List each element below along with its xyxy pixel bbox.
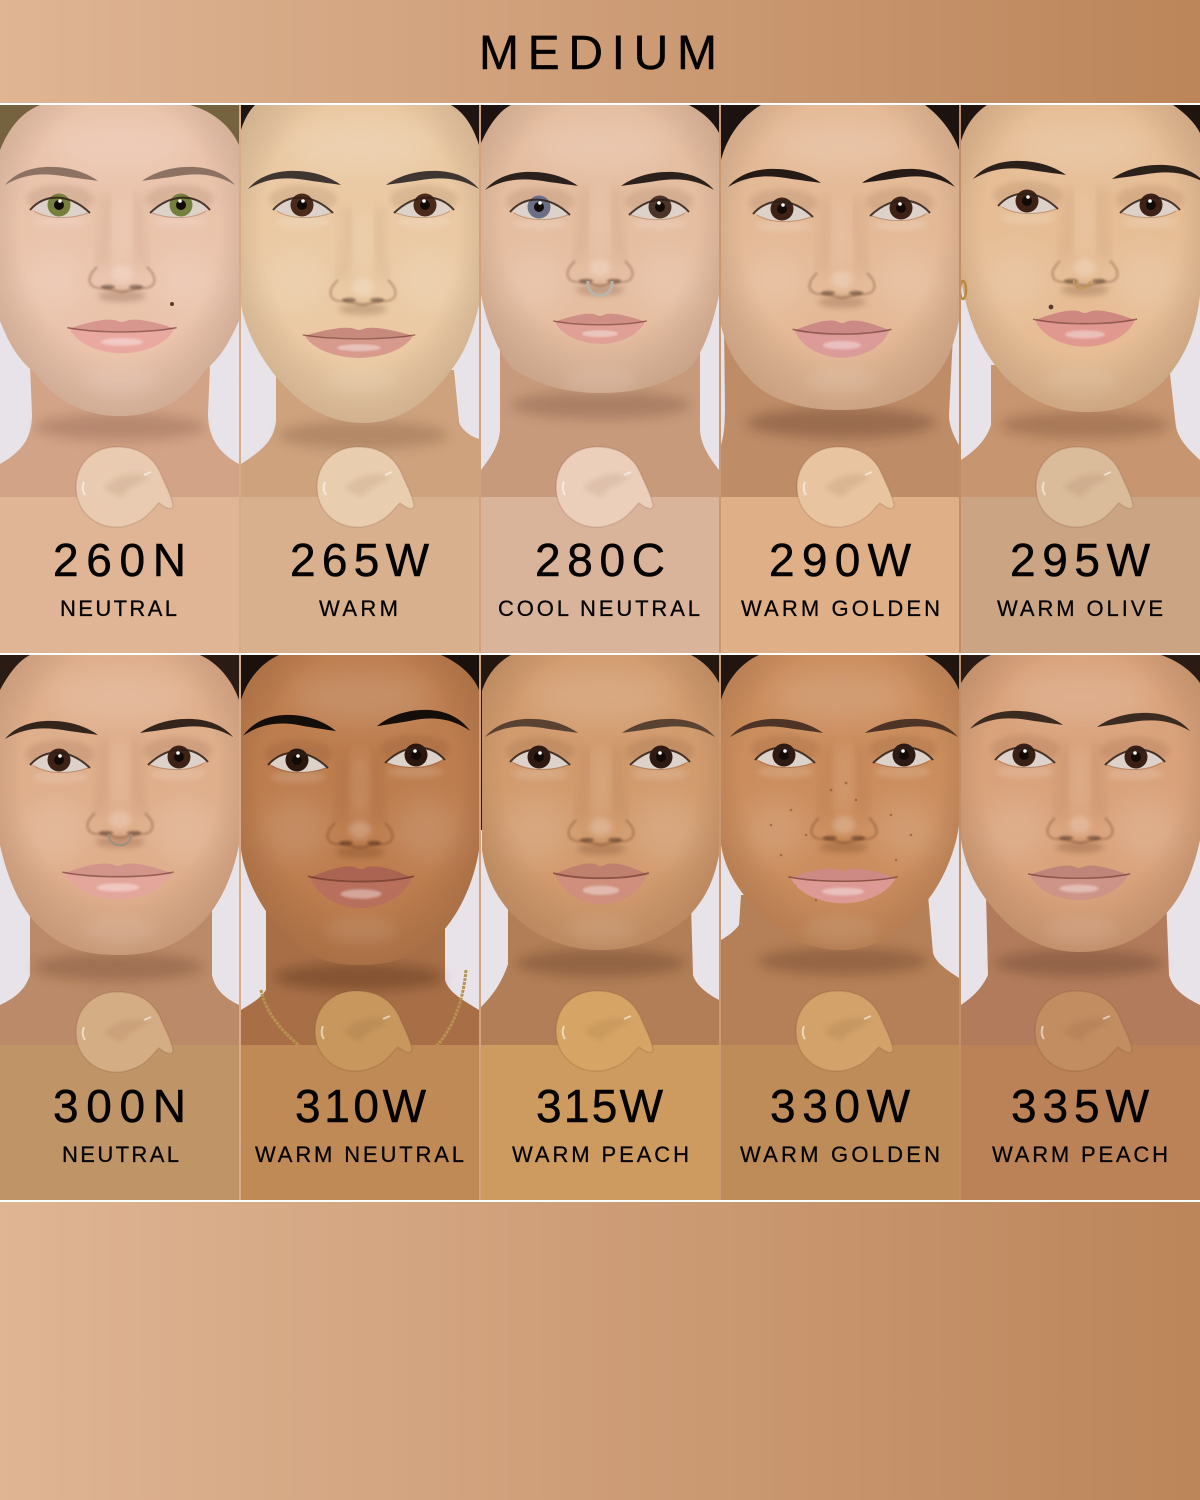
panel: shade 335W (961, 655, 1200, 1200)
title: MEDIUM (479, 27, 717, 80)
shade name: NEUTRAL (62, 1142, 179, 1167)
portrait 300N (0, 655, 239, 1045)
panel: shade 295W (960, 105, 1200, 653)
swatch 295W (1036, 447, 1133, 527)
shade name: WARM GOLDEN (740, 1142, 940, 1167)
portrait 260N (0, 105, 239, 497)
panel: shade 310W (241, 655, 479, 1200)
earrings (960, 281, 966, 299)
portrait 315W (481, 655, 719, 1045)
portrait 290W (721, 105, 959, 497)
swatch 315W (556, 991, 653, 1071)
label block 290W (721, 497, 959, 653)
panel: shade 300N (0, 655, 239, 1200)
panel: shade 265W (241, 105, 479, 653)
shade name: WARM (319, 596, 398, 621)
label block 315W (481, 1045, 719, 1200)
label block 280C (481, 497, 719, 653)
label block 300N (0, 1045, 239, 1200)
septum ring (109, 834, 131, 845)
shade name: WARM OLIVE (997, 596, 1163, 621)
septum ring (588, 281, 612, 295)
panel: shade 280C (481, 105, 719, 653)
portrait 280C (481, 105, 719, 497)
portrait 310W (241, 655, 479, 1045)
swatch 260N (76, 447, 173, 527)
nose ring (1074, 280, 1090, 288)
swatch 335W (1035, 991, 1132, 1071)
label block 310W (241, 1045, 479, 1200)
shade code: 310W (295, 1080, 427, 1132)
shade code: 330W (770, 1080, 911, 1132)
label block 335W (961, 1045, 1200, 1200)
portrait 330W (721, 655, 959, 1045)
portrait 265W (241, 105, 479, 497)
shade name: WARM PEACH (992, 1142, 1168, 1167)
swatch 290W (797, 447, 894, 527)
label block 330W (721, 1045, 959, 1200)
label block 295W (961, 497, 1200, 653)
panel: shade 315W (481, 655, 719, 1200)
panel: shade 290W (721, 105, 959, 653)
shade code: 335W (1011, 1080, 1150, 1132)
swatch 310W (315, 991, 412, 1071)
shade code: 300N (53, 1080, 186, 1132)
shade name: COOL NEUTRAL (498, 596, 700, 621)
freckles (770, 782, 912, 901)
shade name: WARM NEUTRAL (255, 1142, 464, 1167)
shade code: 295W (1010, 534, 1151, 586)
swatch 280C (556, 447, 653, 527)
swatch 300N (76, 992, 173, 1072)
portrait 295W (961, 105, 1200, 497)
shade name: WARM GOLDEN (741, 596, 940, 621)
shade code: 280C (535, 534, 665, 586)
label block 265W (241, 497, 479, 653)
shade code: 290W (769, 534, 912, 586)
shade name: NEUTRAL (60, 596, 177, 621)
shade code: 315W (536, 1080, 664, 1132)
shade code: 265W (290, 534, 430, 586)
panel: shade 260N (0, 105, 239, 653)
panel: shade 330W (721, 655, 959, 1200)
portrait 335W (961, 655, 1200, 1045)
label block 260N (0, 497, 239, 653)
swatch 330W (796, 991, 893, 1071)
necklace (261, 970, 466, 1047)
swatch 265W (317, 447, 414, 527)
shade code: 260N (53, 534, 186, 586)
shade name: WARM PEACH (512, 1142, 689, 1167)
